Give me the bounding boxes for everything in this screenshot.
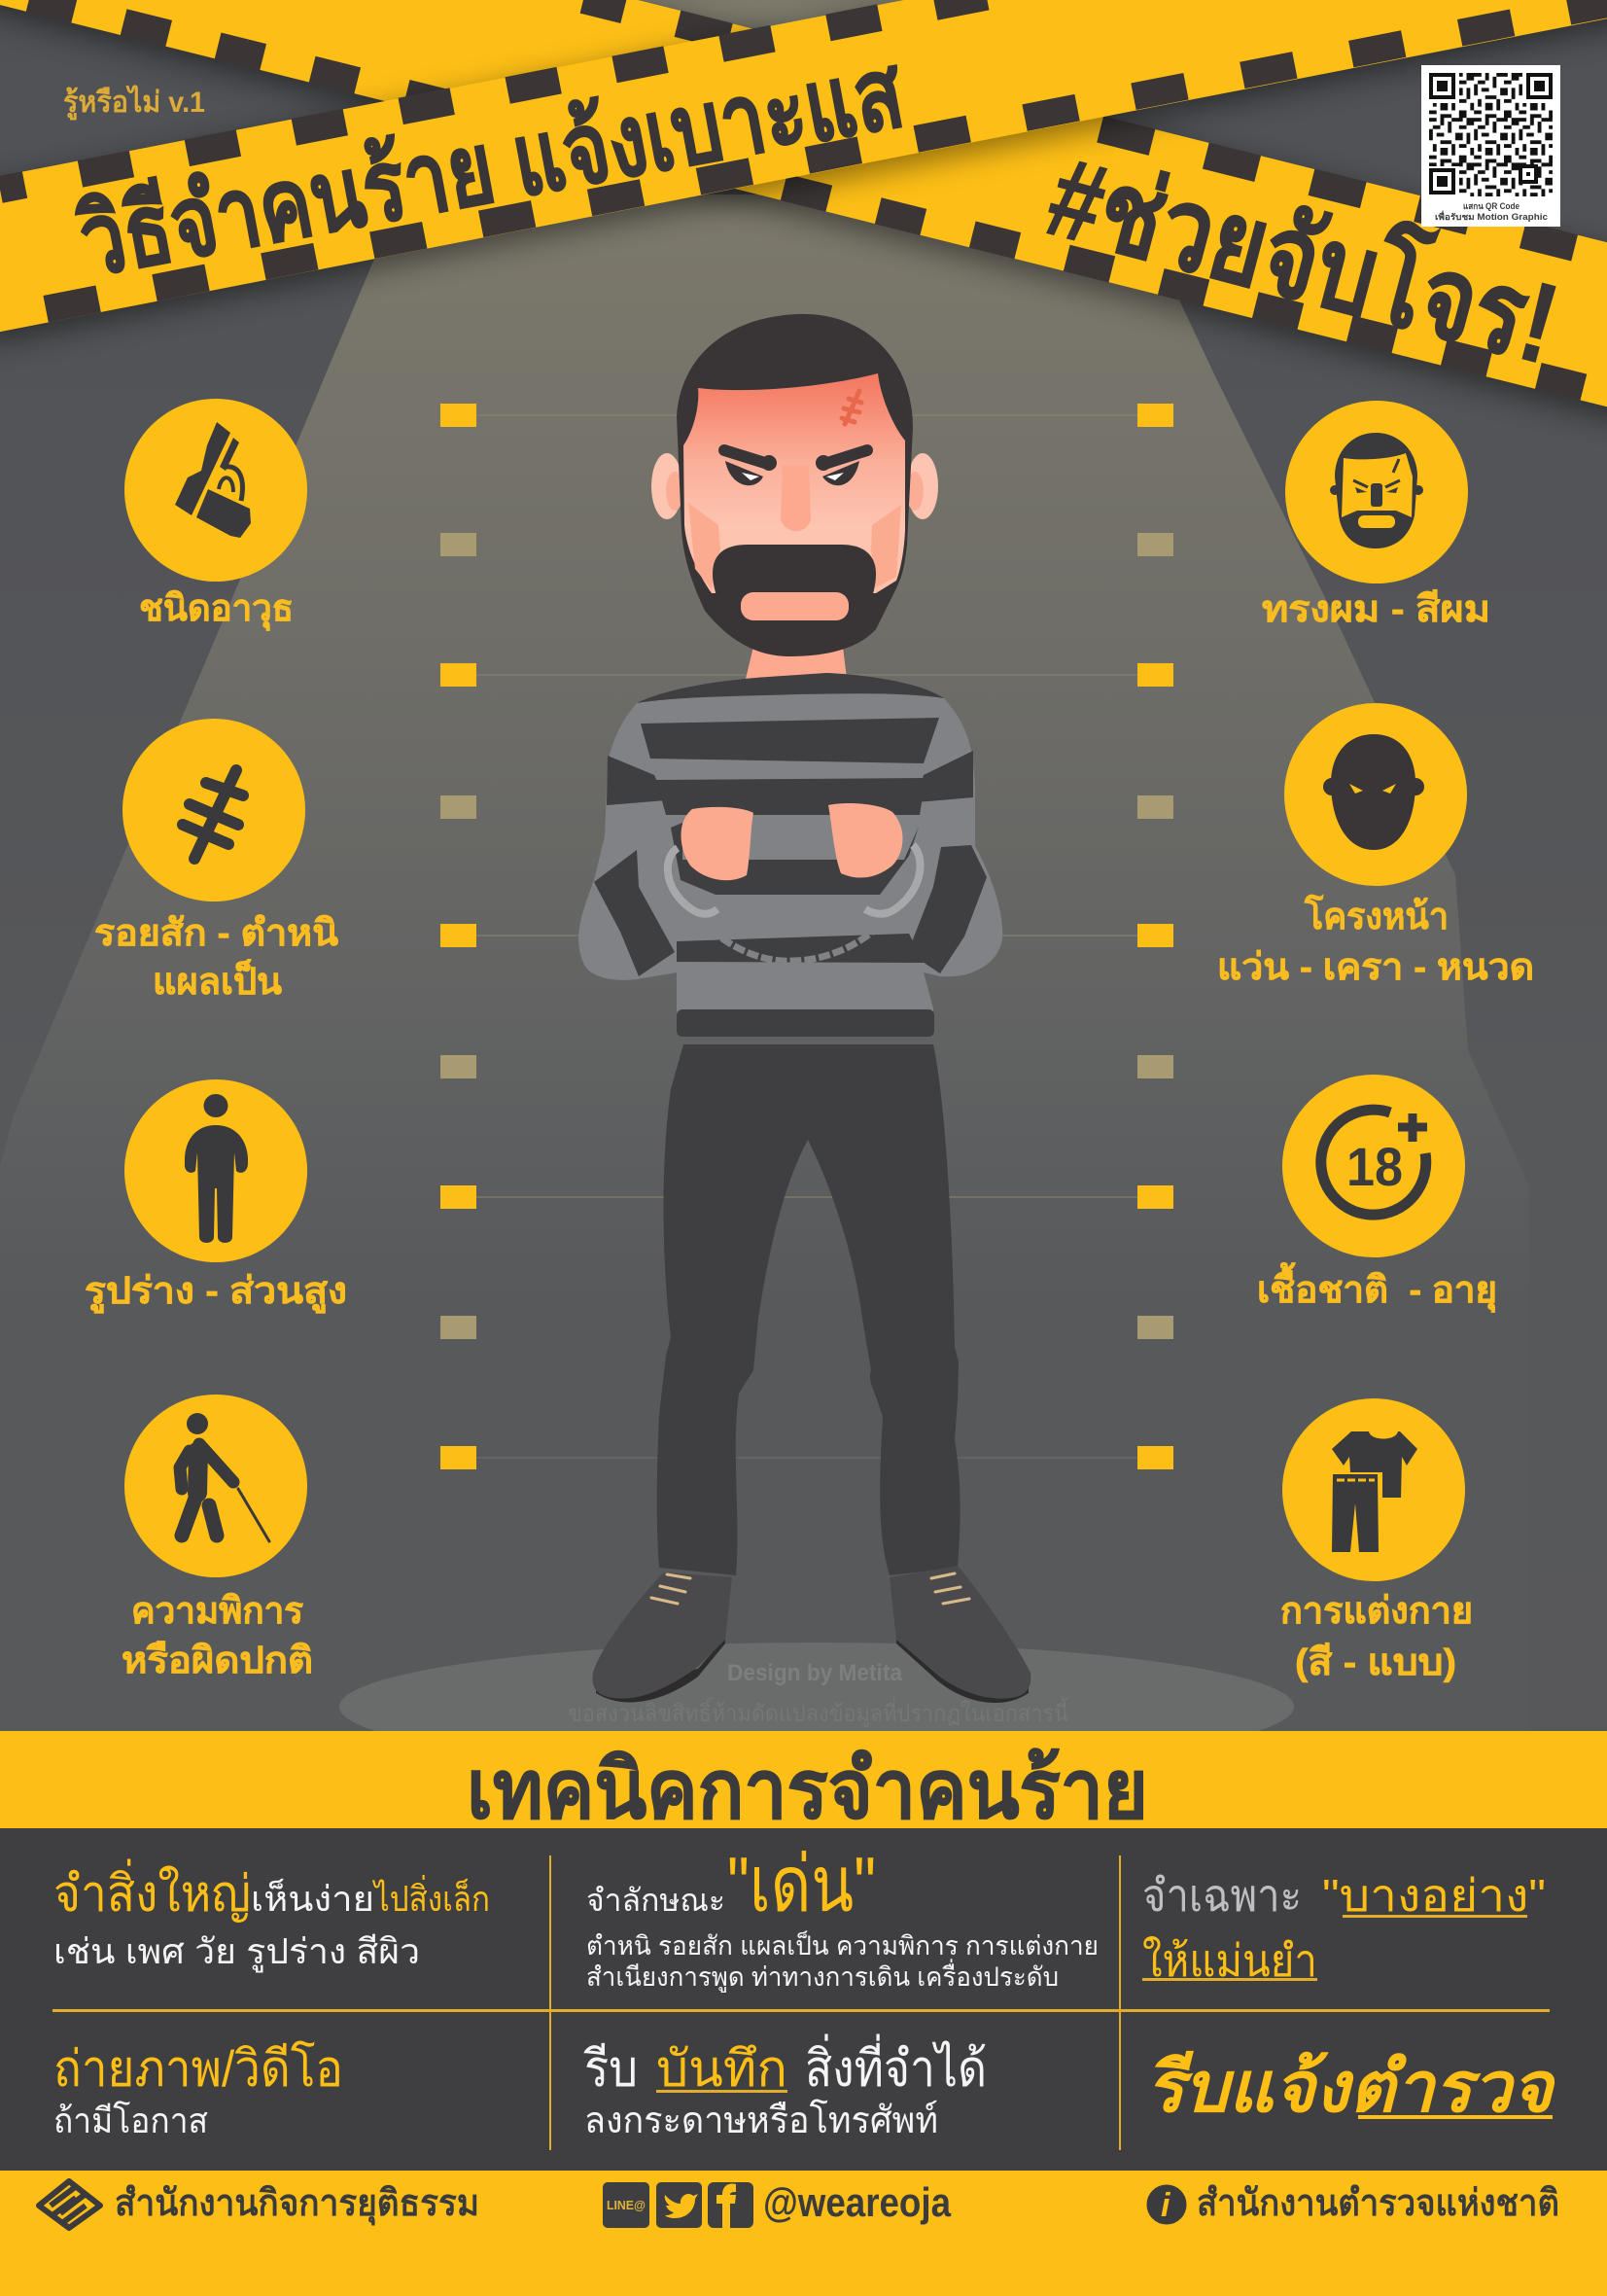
label: hair: ทรงผม - สีผม (1262, 589, 1490, 630)
head hair and beard (677, 314, 913, 656)
label: face: แว่น - เครา - หนวด (1217, 947, 1534, 988)
right fist (828, 803, 902, 878)
tape: right descending (0, 0, 1607, 418)
forehead scar (842, 391, 861, 424)
height chart rulers (440, 404, 1173, 1469)
cell: remember big things first: ไปสิ่งเล็ก (371, 1875, 490, 1919)
sweater dark stripes (594, 673, 987, 1037)
label: disability: ความพิการ (131, 1591, 304, 1632)
panel: techniques heading band (0, 1731, 1607, 1828)
cell: remember some details accurately: ให้แม่นยำ (1142, 1935, 1317, 1986)
handcuffs (668, 845, 921, 961)
icon: justice office logo (39, 2181, 100, 2228)
cell: photo or video: ถ่ายภาพ/วิดีโอ (53, 2040, 343, 2098)
label: weapon: ชนิดอาวุธ (139, 588, 294, 631)
cell: record quickly (583, 2033, 987, 2141)
footer text: justice office: สำนักงานกิจการยุติธรรม (115, 2183, 479, 2226)
icon: age 18+ (1282, 1075, 1465, 1257)
right eyebrow end (816, 455, 831, 471)
floor spotlight ellipse (339, 1643, 1294, 1771)
icon: hair (1285, 401, 1468, 583)
cell: notify police: รีบแจ้งตำรวจ (1146, 2049, 1556, 2127)
icon: clothes (1282, 1398, 1465, 1581)
watermark credit: Design by Metita (727, 1660, 903, 1686)
cell: remember distinctive traits: ตำหนิ รอยสัก แผลเป็น ความพิการ การแต่งกาย (586, 1928, 1099, 1960)
cell: record quickly: ลงกระดาษหรือโทรศัพท์ (584, 2099, 938, 2141)
spotlight beam (0, 194, 1529, 1731)
cell: remember some details accurately: "บางอย่าง" (1322, 1870, 1546, 1921)
title on tape: วิธีจำคนร้าย แจ้งเบาะแส (70, 36, 912, 298)
top centre gap (622, 0, 919, 44)
criminal character (578, 314, 1031, 1703)
icon: facebook (708, 2182, 753, 2228)
right shoe (890, 1566, 1031, 1703)
QR code card: เพื่อรับชม Motion Graphic (1435, 210, 1548, 222)
sweater base (578, 678, 1002, 1033)
icon: LINE (603, 2182, 649, 2228)
label: tattoo and marks: รอยสัก - ตำหนิ (94, 913, 338, 954)
footer text: handle: @weareoja (763, 2179, 952, 2225)
cell: remember some details accurately (1142, 1870, 1546, 1986)
eyes (725, 461, 859, 485)
left shoe (593, 1572, 732, 1702)
heading: techniques: เทคนิคการจำคนร้าย (467, 1744, 1148, 1835)
eyebrows (724, 450, 867, 464)
cell: remember distinctive traits: จำลักษณะ (586, 1883, 725, 1918)
icon: LINE: LINE@ (607, 2198, 646, 2212)
icon: body shape (124, 1079, 307, 1262)
cell: photo or video (53, 2040, 343, 2140)
left ear (651, 453, 683, 519)
watermark copyright: ขอสงวนลิขสิทธิ์ห้ามดัดแปลงข้อมูลที่ปรากฏในเอกสารนี้ (568, 1696, 1068, 1728)
cell: record quickly: สิ่งที่จำได้ (805, 2033, 987, 2098)
label: disability: หรือผิดปกติ (122, 1641, 313, 1681)
mouth (741, 592, 849, 620)
cell: remember some details accurately: จำเฉพาะ (1142, 1870, 1302, 1921)
cell: remember big things first (53, 1858, 490, 1973)
cheek shadows (688, 503, 901, 589)
icon: disability (124, 1395, 307, 1577)
cell: remember big things first: จำสิ่งใหญ่ (53, 1858, 251, 1923)
left fist (681, 807, 753, 880)
cell: photo or video: ถ้ามีโอกาส (53, 2101, 208, 2140)
label: nationality and age: เชื้อชาติ - อายุ (1257, 1262, 1497, 1313)
cell: remember big things first: เช่น เพศ วัย รูปร่าง สีผิว (53, 1931, 420, 1973)
tape: main rising (0, 0, 1607, 336)
label: disability (122, 1591, 313, 1681)
label: face (1217, 894, 1534, 988)
label: tattoo and marks: แผลเป็น (153, 959, 282, 1003)
cell: remember distinctive traits: สำเนียงการพูด ท่าทางการเดิน เครื่องประดับ (586, 1959, 1059, 1993)
icon: weapon (124, 399, 307, 582)
QR code card (1421, 65, 1560, 227)
nose (781, 465, 811, 531)
footer text: police: สำนักงานตำรวจแห่งชาติ (1197, 2183, 1559, 2224)
icon: age 18+: 18 (1346, 1136, 1403, 1197)
cell: remember distinctive traits: "เด่น" (727, 1841, 876, 1927)
cell: record quickly: บันทึก (656, 2041, 787, 2098)
panel: footer (0, 2171, 1607, 2296)
icon: scar (122, 719, 305, 901)
icon: info (1147, 2184, 1186, 2225)
series tag: รู้หรือไม่ v.1 (63, 85, 205, 121)
label: body shape: รูปร่าง - ส่วนสูง (85, 1271, 347, 1314)
pants (657, 1044, 961, 1575)
icon: info: i (1161, 2187, 1171, 2224)
icon: face (1284, 703, 1467, 886)
cell: remember big things first: เห็นง่าย (251, 1877, 374, 1919)
QR code card: แสกน QR Code (1463, 201, 1520, 211)
right ear (906, 453, 938, 519)
label: clothes: การแต่งกาย (1280, 1591, 1473, 1632)
cell: record quickly: รีบ (583, 2041, 638, 2098)
panel: techniques grid (0, 1828, 1607, 2171)
icon: twitter (656, 2182, 702, 2228)
label: face: โครงหน้า (1304, 894, 1449, 937)
label: tattoo and marks (94, 913, 338, 1003)
neck (746, 647, 847, 679)
face skin (683, 373, 905, 593)
label: clothes: (สี - แบบ) (1295, 1643, 1456, 1683)
cell: remember distinctive traits (586, 1841, 1099, 1993)
goatee (713, 545, 876, 653)
label: clothes (1280, 1591, 1473, 1683)
